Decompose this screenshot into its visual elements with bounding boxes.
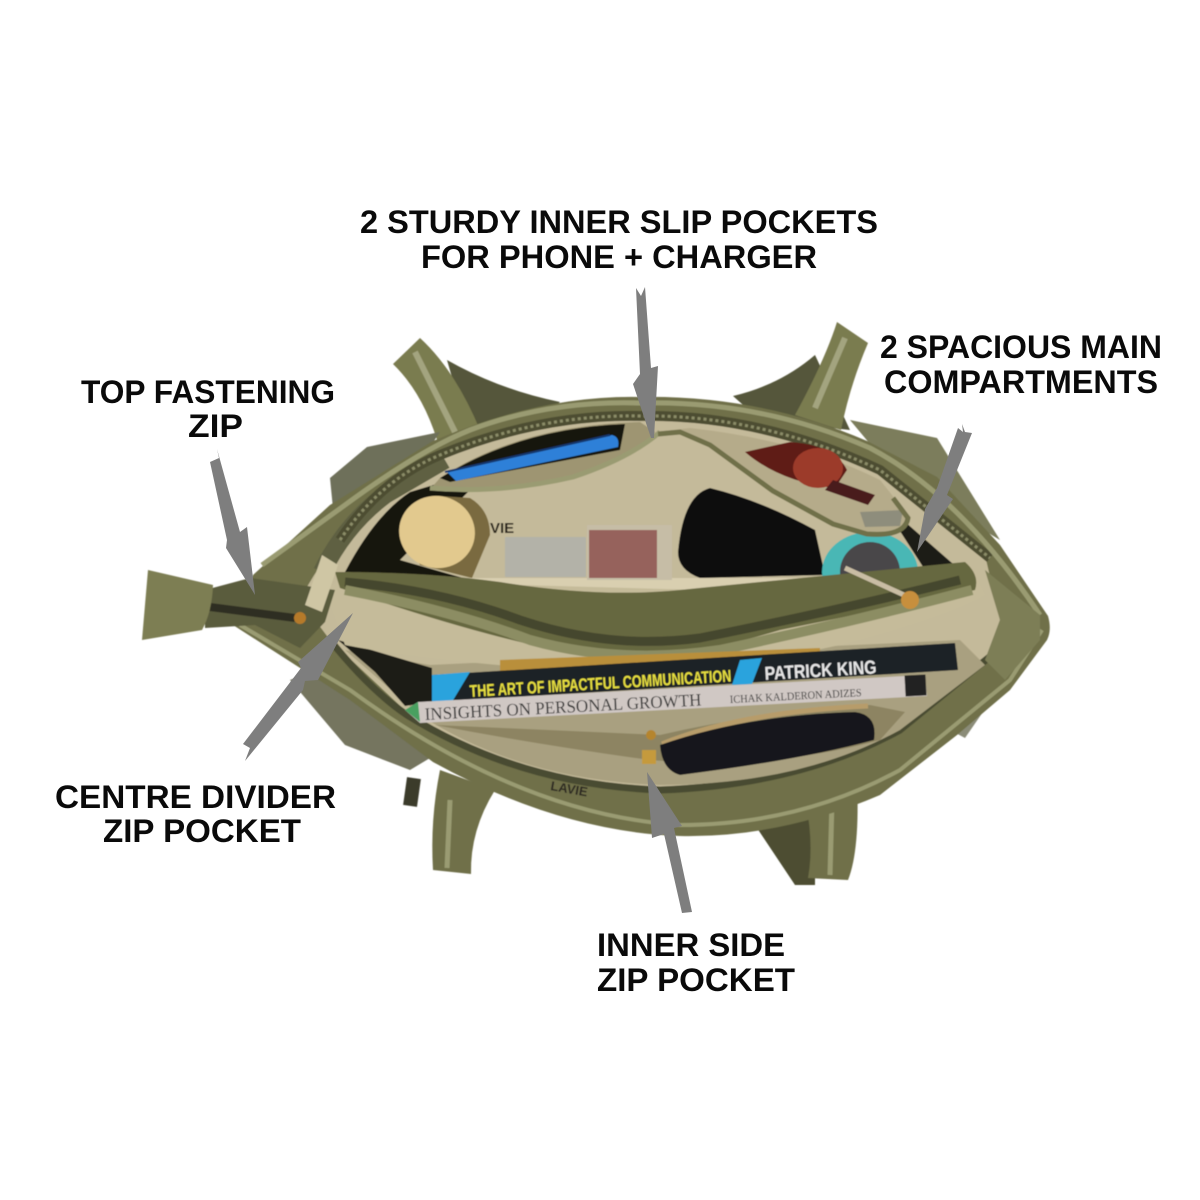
- lining label: VIE: [490, 520, 514, 537]
- callout: main compartments: 2 SPACIOUS MAIN: [880, 329, 1162, 365]
- lining print LAVIE: LAVIE: [549, 778, 589, 799]
- lower rim highlight: [240, 625, 1042, 825]
- arrow: inner slip pockets: [633, 287, 658, 438]
- callout: centre divider zip pocket: ZIP POCKET: [103, 813, 301, 849]
- arrow: centre divider pocket: [243, 613, 353, 761]
- open handbag: [142, 322, 1050, 885]
- left zip tape: [322, 460, 445, 572]
- phone pocket: [430, 422, 660, 490]
- callout: top fastening zip: TOP FASTENING: [81, 374, 335, 410]
- quilted outer shell: [290, 420, 1005, 807]
- callout: top fastening zip: ZIP: [188, 408, 243, 444]
- bag interior lining: [300, 415, 1000, 790]
- arrow: top fastening zip: [210, 449, 255, 595]
- dark wedge under divider: [338, 640, 432, 706]
- centre divider: [325, 562, 985, 671]
- callout: inner side zip pocket: ZIP POCKET: [597, 962, 795, 998]
- right zip pull: [845, 568, 919, 609]
- cream bottle: [391, 487, 490, 578]
- callout: inner slip pockets: FOR PHONE + CHARGER: [421, 239, 817, 275]
- book: patrick king: THE ART OF IMPACTFUL COMMUNICATION: [469, 666, 732, 701]
- arrow: inner side zip pocket: [647, 772, 692, 913]
- book: patrick king: [432, 643, 958, 702]
- book: insights on personal growth: INSIGHTS ON PERSONAL GROWTH: [424, 690, 702, 724]
- callout: centre divider zip pocket: CENTRE DIVIDER: [55, 779, 336, 815]
- callout: main compartments: COMPARTMENTS: [884, 364, 1158, 400]
- right slip pocket: [655, 428, 908, 534]
- book: insights on personal growth: ICHAK KALDERON ADIZES: [730, 687, 862, 706]
- bag rim: [233, 397, 1050, 836]
- inner zip pocket: [435, 705, 905, 775]
- callout: inner slip pockets: 2 STURDY INNER SLIP POCKETS: [360, 204, 878, 240]
- cosmetics in pocket: [745, 442, 903, 527]
- grey ball: [840, 542, 900, 602]
- book: patrick king: PATRICK KING: [764, 657, 877, 685]
- lower zip: [330, 640, 998, 790]
- back handles: [393, 322, 868, 450]
- front handles: [432, 770, 858, 885]
- lower lining: [345, 640, 985, 785]
- inner shadow areas: [345, 480, 960, 595]
- right gusset: [985, 570, 1040, 680]
- pink bottle: [587, 525, 672, 580]
- pocket lip: [658, 432, 908, 534]
- left zip pull: [142, 555, 338, 648]
- arrow: main compartments: [917, 424, 972, 552]
- top zip: [340, 416, 990, 558]
- black compact: [678, 488, 825, 578]
- callout: inner side zip pocket: INNER SIDE: [597, 927, 785, 963]
- upper rim highlight: [262, 403, 1040, 615]
- teal tin: [822, 532, 918, 612]
- book: insights on personal growth: [405, 674, 927, 724]
- silver cylinder: [505, 537, 586, 577]
